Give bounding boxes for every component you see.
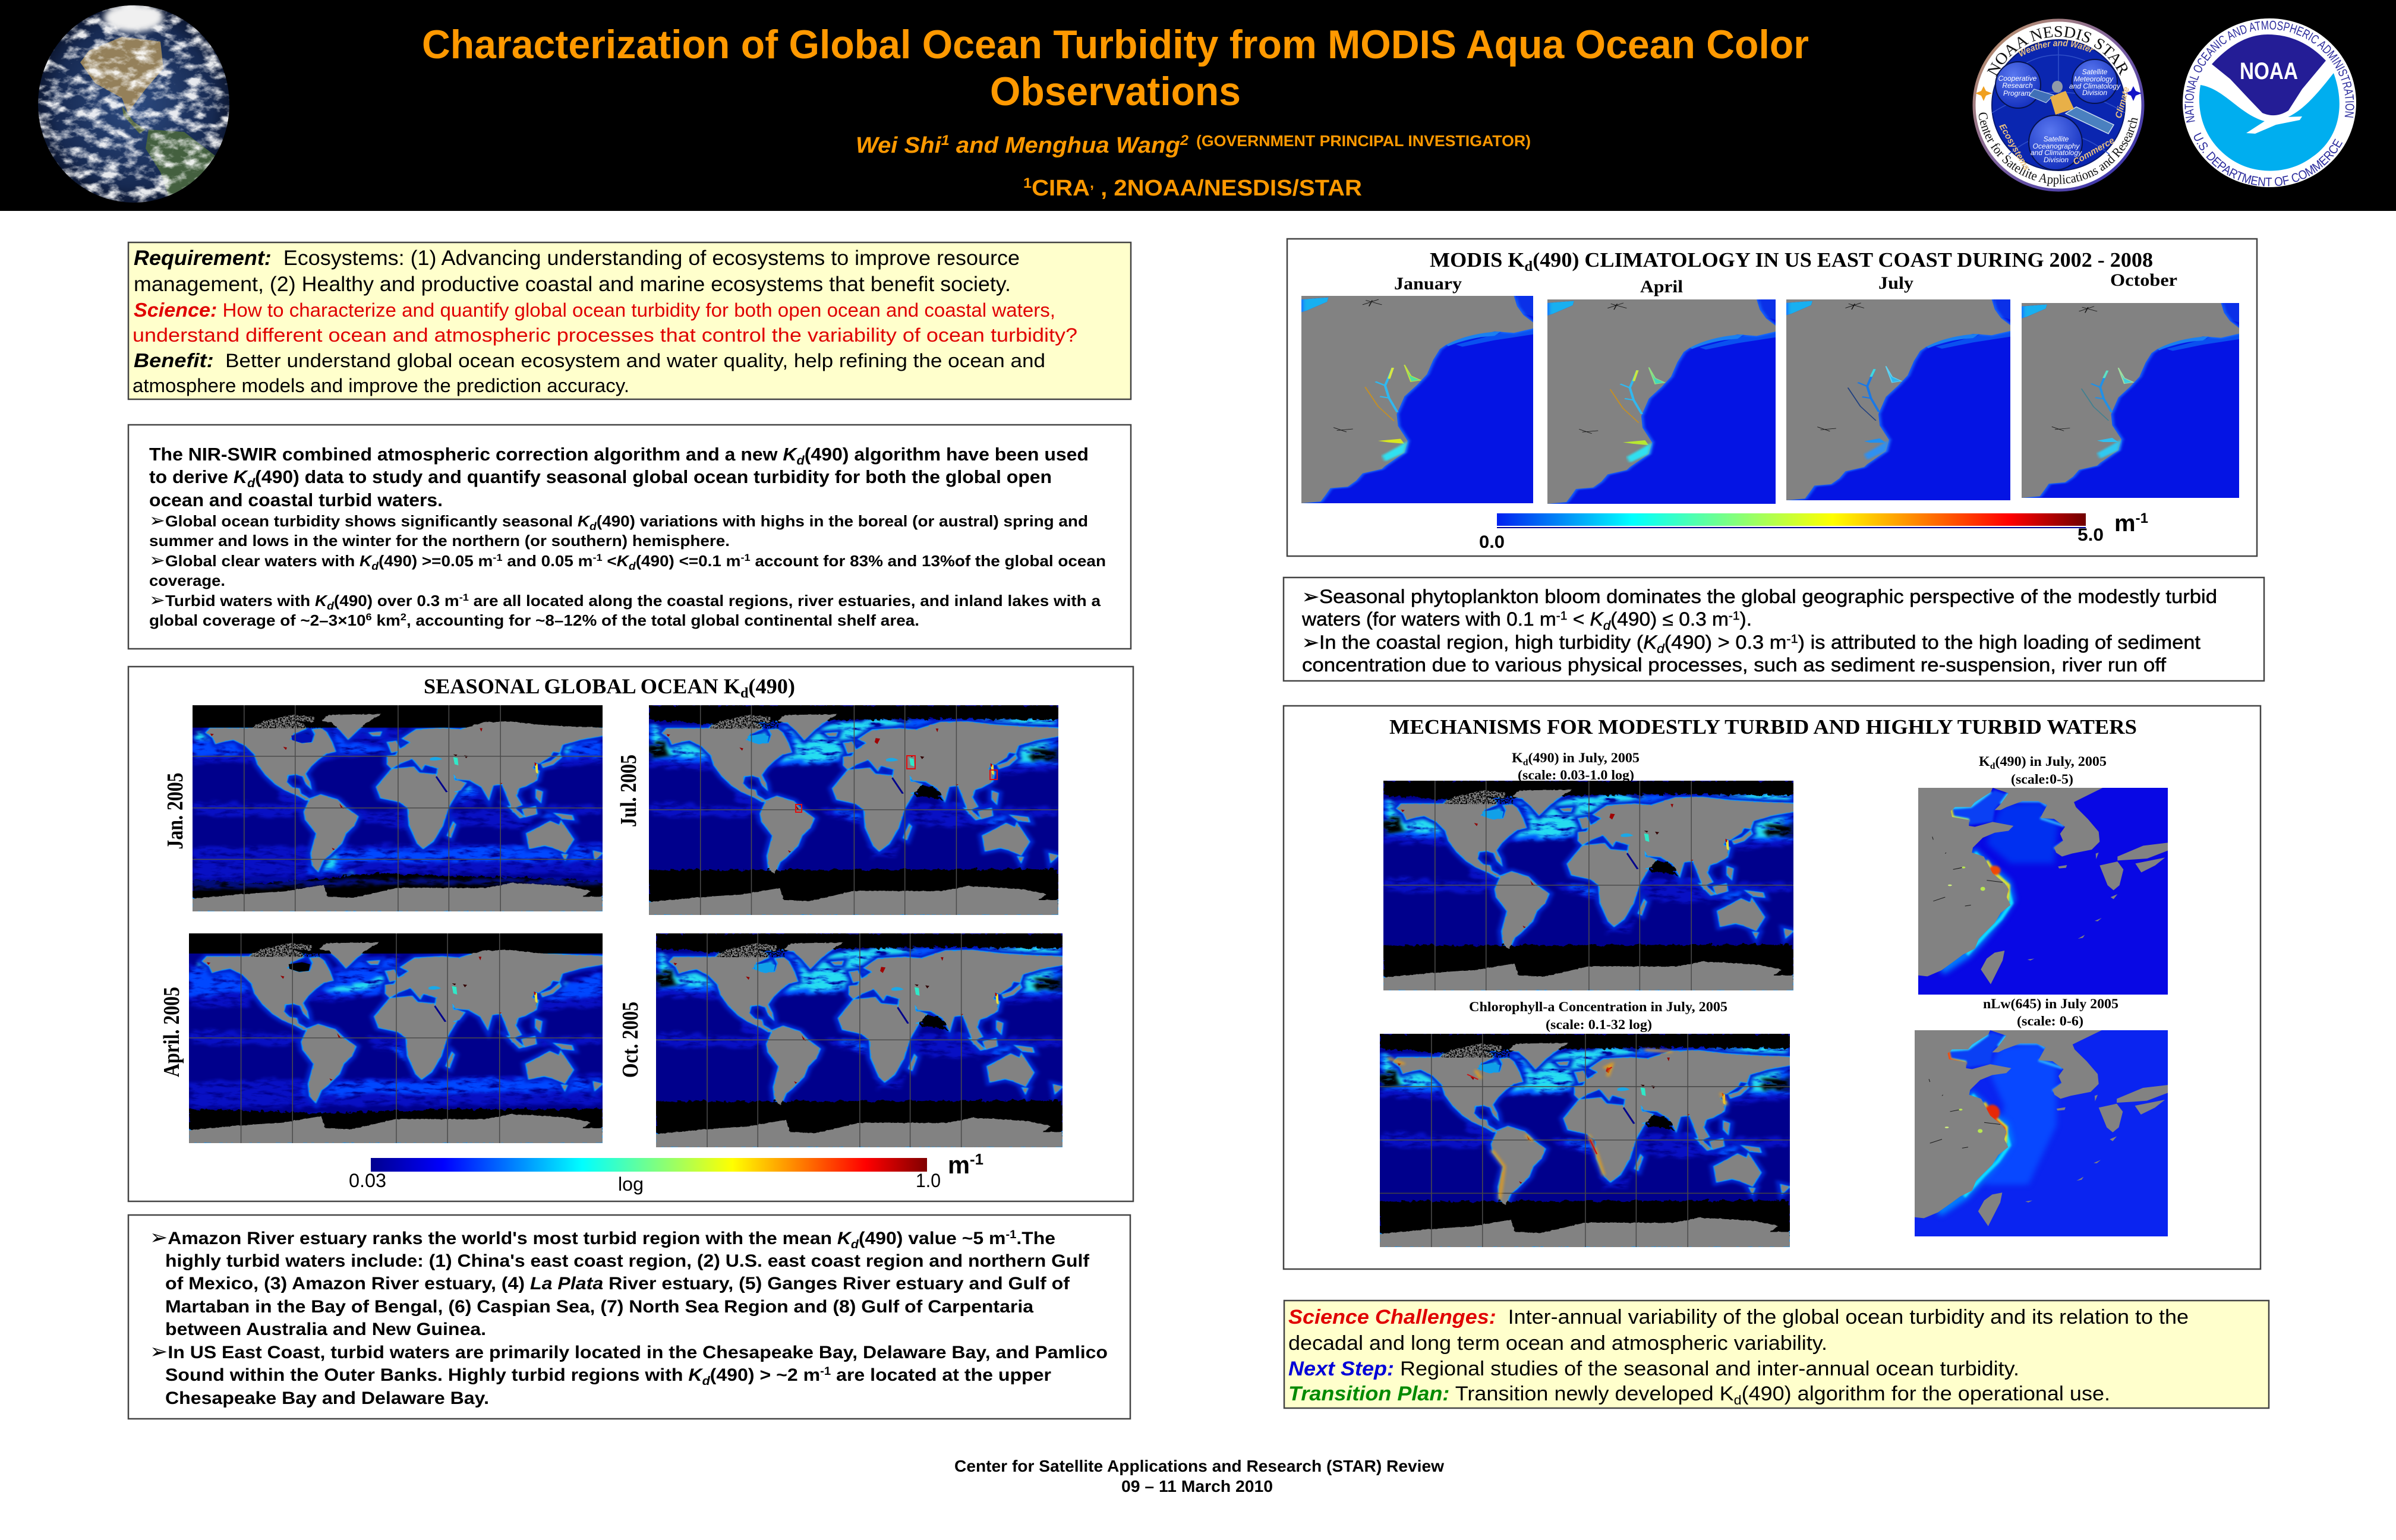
label: April. 2005: April. 2005 <box>159 987 184 1077</box>
panel: algorithm summary text: d <box>629 560 636 572</box>
colour scale: 0.03 to 1.0 log: log <box>618 1173 644 1195</box>
heading: seasonal maps: (490) <box>748 674 795 698</box>
title <box>422 22 1809 114</box>
panel: requirement, science and benefit: Benefit: Better understand global ocean ecosystem and water quality, help refining the ocean and <box>134 349 1045 371</box>
caption: chlorophyll-a: Chlorophyll-a Concentration in July, 2005 <box>1469 999 1727 1014</box>
panel: challenges, next step, transition plan: d <box>1734 1393 1742 1408</box>
panel: turbid regions text: d <box>702 1375 710 1388</box>
map: Kd(490) China coast <box>1918 788 2168 995</box>
icon: Earth globe <box>38 4 229 203</box>
panel: phytoplankton and sediment text <box>1284 578 2264 681</box>
panel: algorithm summary text: 2 <box>401 611 406 623</box>
panel: turbid regions text: (490) value ~5 m <box>859 1229 1005 1248</box>
icon: NOAA NESDIS STAR seal: Program <box>2003 89 2031 97</box>
panel: challenges, next step, transition plan: Next Step: Regional studies of the seasonal and inter-annual ocean turbidity. <box>1288 1358 2019 1380</box>
panel: algorithm summary text: d <box>327 600 335 612</box>
icon: NOAA NESDIS STAR seal: NOAA NESDIS STAR <box>1987 26 2127 77</box>
icon: NOAA logo: NOAA <box>2240 58 2298 84</box>
panel: turbid regions text: -1 <box>820 1365 831 1378</box>
panel: algorithm summary text: ocean and coastal turbid waters. <box>149 490 443 510</box>
icon: NOAA NESDIS STAR seal: Center for Satellite Applications and Research <box>1979 113 2138 187</box>
map: east coast October <box>2022 303 2239 498</box>
panel: algorithm summary text: ➢Global ocean turbidity shows significantly seasonal K <box>149 510 589 531</box>
panel: algorithm summary text: d <box>371 560 379 572</box>
colour scale: 0.03 to 1.0 log: 1.0 <box>916 1170 941 1191</box>
affiliations: , <box>1090 175 1094 191</box>
panel: algorithm summary text: (490) >=0.05 m <box>379 552 493 570</box>
panel: phytoplankton and sediment text: (490) > 0.3 m <box>1664 632 1786 653</box>
panel: algorithm summary text: (490) data to study and quantify seasonal global ocean turbidity for both the global open <box>255 466 1052 487</box>
panel: seasonal global ocean Kd(490) <box>128 667 1133 1201</box>
icon: NOAA NESDIS STAR seal: Division <box>2044 156 2069 164</box>
colour scale: 0.0 to 5.0: m <box>2114 510 2136 537</box>
label: April: April <box>1640 277 1683 296</box>
panel: turbid regions text: .The <box>1016 1229 1055 1248</box>
panel: requirement, science and benefit: management, (2) Healthy and productive coastal and marine ecosystems that benefit society. <box>134 273 1011 296</box>
colour scale: 0.03 to 1.0 log: m <box>948 1151 970 1179</box>
panel: algorithm summary text: coverage. <box>149 572 225 589</box>
panel: phytoplankton and sediment text: ). <box>1740 608 1752 630</box>
caption: nLw(645) <box>1983 996 2118 1028</box>
caption: chlorophyll-a: (scale: 0.1-32 log) <box>1546 1017 1652 1032</box>
panel: turbid regions text: (490) > ~2 m <box>710 1365 820 1385</box>
panel: challenges, next step, transition plan: (490) algorithm for the operational use. <box>1742 1383 2110 1405</box>
panel: mechanisms for turbid waters <box>1284 706 2261 1269</box>
label: January: January <box>1394 274 1462 294</box>
panel: algorithm summary text: summer and lows in the winter for the northern (or southern) hemisphere. <box>149 532 730 550</box>
authors: 1 <box>941 132 950 149</box>
icon: NOAA NESDIS STAR seal: and Climatology <box>2069 82 2121 90</box>
caption: Kd(490) log scale: K <box>1512 750 1522 765</box>
panel: algorithm summary text: The NIR-SWIR combined atmospheric correction algorithm and a new K <box>149 444 796 465</box>
panel: turbid regions text: of Mexico, (3) Amazon River estuary, (4) La Plata River estuary, (5) Ganges River estuary and Gulf of <box>165 1274 1070 1293</box>
label: July: July <box>1878 273 1913 293</box>
caption: Kd(490) log scale <box>1512 750 1640 782</box>
map: January 2005 <box>193 705 603 911</box>
caption: Kd(490) China coast: (scale:0-5) <box>2011 772 2073 787</box>
panel: algorithm summary text: account for 83% and 13%of the global ocean <box>751 552 1106 570</box>
panel: turbid regions text: d <box>851 1238 859 1251</box>
panel: algorithm summary text: -1 <box>592 552 603 563</box>
authors <box>856 132 1531 158</box>
icon: NOAA NESDIS STAR seal: Satellite <box>2044 135 2069 143</box>
panel: phytoplankton and sediment text: K <box>1590 608 1604 630</box>
map: April 2005 <box>189 933 603 1143</box>
colour scale: 0.03 to 1.0 log: -1 <box>970 1150 983 1168</box>
icon: NOAA NESDIS STAR seal: Research <box>2002 81 2033 90</box>
panel: algorithm summary text: 6 <box>366 611 372 623</box>
authors: and Menghua Wang <box>950 133 1180 158</box>
icon: NOAA NESDIS STAR seal: Satellite <box>2082 68 2108 76</box>
panel: challenges, next step, transition plan: Science Challenges: Inter-annual variability of the global ocean turbidity and its relation to the <box>1288 1306 2189 1328</box>
panel: algorithm summary text: < <box>603 552 617 570</box>
panel: turbid regions text: highly turbid waters include: (1) China's east coast region, (2) U.S. east coast region and northern Gulf <box>165 1251 1090 1271</box>
icon: NOAA NESDIS STAR seal: and Climatology <box>2031 149 2082 157</box>
footer <box>954 1457 1444 1495</box>
footer: 09 – 11 March 2010 <box>1121 1477 1273 1495</box>
colour scale: 0.0 to 5.0: -1 <box>2136 510 2148 526</box>
caption: Kd(490) log scale: (scale: 0.03-1.0 log) <box>1518 768 1634 782</box>
affiliations: 1 <box>1023 175 1032 191</box>
heading: climatology: MODIS K <box>1430 248 1522 272</box>
panel: algorithm summary text: ➢Global clear waters with K <box>149 550 371 571</box>
panel: requirement, science and benefit <box>128 242 1131 399</box>
heading: mechanisms: MECHANISMS FOR MODESTLY TURBID AND HIGHLY TURBID WATERS <box>1389 715 2137 739</box>
icon: NOAA NESDIS STAR seal: Meteorology <box>2074 75 2114 83</box>
label: October: October <box>2110 270 2177 290</box>
icon: NOAA logo: U.S. DEPARTMENT OF COMMERCE <box>2194 132 2343 187</box>
panel: US east coast climatology <box>1287 239 2257 556</box>
panel: algorithm summary text <box>128 425 1131 649</box>
affiliations: CIRA <box>1032 176 1090 201</box>
panel: phytoplankton and sediment text: waters (for waters with 0.1 m <box>1302 608 1545 630</box>
map: Kd(490) July 2005 global <box>1383 781 1793 990</box>
map: east coast April <box>1547 299 1776 504</box>
panel: algorithm summary text: K <box>617 552 630 570</box>
heading: seasonal maps: d <box>740 686 749 701</box>
heading: climatology: (490) CLIMATOLOGY IN US EAST COAST DURING 2002 - 2008 <box>1533 248 2153 272</box>
colour scale: 0.0 to 5.0 <box>1479 510 2148 552</box>
caption: Kd(490) China coast <box>1979 754 2107 787</box>
colour scale: 0.0 to 5.0: 5.0 <box>2077 525 2104 545</box>
panel: requirement, science and benefit: understand different ocean and atmospheric processes that control the variability of ocean turbidity? <box>133 324 1077 346</box>
caption: nLw(645): nLw(645) in July 2005 <box>1983 996 2118 1011</box>
icon: NOAA NESDIS STAR seal: Climate <box>2113 86 2132 119</box>
panel: turbid regions text: -1 <box>1005 1229 1017 1241</box>
authors: (GOVERNMENT PRINCIPAL INVESTIGATOR) <box>1196 132 1531 150</box>
panel: algorithm summary text: , accounting for ~8–12% of the total global continental shelf area. <box>406 611 919 629</box>
colour scale: 0.03 to 1.0 log <box>349 1150 983 1195</box>
title: Characterization of Global Ocean Turbidity from MODIS Aqua Ocean Color <box>422 22 1809 67</box>
icon: NOAA NESDIS STAR seal: Ecosystems <box>1997 122 2032 172</box>
panel: challenges, next step, transition plan: Transition Plan: Transition newly developed K <box>1288 1383 1718 1405</box>
map: east coast July <box>1786 299 2010 500</box>
colour scale: 0.0 to 5.0: 0.0 <box>1479 532 1505 552</box>
panel: phytoplankton and sediment text: (490) ≤ 0.3 m <box>1610 608 1729 630</box>
caption: Kd(490) log scale: d <box>1523 758 1528 768</box>
panel: algorithm summary text: -1 <box>459 592 469 603</box>
heading: seasonal maps: SEASONAL GLOBAL OCEAN K <box>424 674 738 698</box>
panel: requirement, science and benefit: Requirement: Ecosystems: (1) Advancing understanding of ecosystems to improve resource <box>134 247 1020 270</box>
map: east coast January <box>1301 296 1533 503</box>
panel: phytoplankton and sediment text: ➢In the coastal region, high turbidity ( K <box>1302 631 1656 654</box>
map: nLw(645) China coast <box>1915 1030 2168 1236</box>
panel: algorithm summary text: and 0.05 m <box>503 552 592 570</box>
icon: NOAA NESDIS STAR seal: Commerce <box>2072 135 2116 167</box>
caption: Kd(490) China coast: d <box>1990 762 1995 771</box>
caption: nLw(645): (scale: 0-6) <box>2017 1014 2083 1028</box>
panel: algorithm summary text: d <box>589 520 597 532</box>
icon: NOAA NESDIS STAR seal: Cooperative <box>1998 74 2037 83</box>
colour scale: 0.03 to 1.0 log: 0.03 <box>349 1170 386 1191</box>
icon: NOAA logo <box>2183 18 2356 187</box>
panel: turbid regions text: Sound within the Outer Banks. Highly turbid regions with K <box>165 1365 701 1385</box>
panel: requirement, science and benefit: Science: How to characterize and quantify global ocean turbidity for both open ocean and coastal waters, <box>134 299 1055 321</box>
panel: algorithm summary text: -1 <box>740 552 751 563</box>
panel: phytoplankton and sediment text: d <box>1657 642 1665 656</box>
header banner <box>0 0 2396 211</box>
panel: phytoplankton and sediment text: -1 <box>1556 610 1567 623</box>
panel: challenges, next step, transition plan <box>1284 1301 2269 1408</box>
icon: NOAA NESDIS STAR seal: Weather and Water <box>2018 40 2094 57</box>
caption: chlorophyll-a <box>1469 999 1727 1032</box>
panel: turbid regions text: are located at the upper <box>831 1365 1051 1385</box>
panel: algorithm summary text: km <box>372 611 401 629</box>
panel: turbid regions text: Chesapeake Bay and Delaware Bay. <box>165 1388 489 1408</box>
authors: Wei Shi <box>856 133 937 158</box>
caption: Kd(490) log scale: (490) in July, 2005 <box>1528 750 1640 765</box>
panel: algorithm summary text: (490) <=0.1 m <box>636 552 740 570</box>
highlight boxes on July map <box>796 756 997 812</box>
panel: turbid regions text: between Australia and New Guinea. <box>165 1320 486 1339</box>
panel: algorithm summary text: d <box>247 476 256 490</box>
panel: phytoplankton and sediment text: < <box>1567 608 1590 630</box>
panel: algorithm summary text: to derive K <box>149 466 247 487</box>
heading: climatology: d <box>1524 259 1533 274</box>
panel: algorithm summary text: -1 <box>493 552 503 563</box>
panel: phytoplankton and sediment text: concentration due to various physical processes, such as sediment re-suspension, river run off <box>1302 654 2166 676</box>
panel: algorithm summary text: (490) over 0.3 m <box>334 592 459 610</box>
panel: turbid regions text: ➢Amazon River estuary ranks the world's most turbid region with the mean K <box>150 1226 850 1249</box>
panel: challenges, next step, transition plan: decadal and long term ocean and atmospheric variability. <box>1288 1332 1827 1355</box>
icon: NOAA logo: NATIONAL OCEANIC AND ATMOSPHERIC ADMINISTRATION <box>2184 20 2354 122</box>
icon: NOAA NESDIS STAR seal: Oceanography <box>2033 142 2080 150</box>
map: chlorophyll-a July 2005 global <box>1380 1034 1790 1247</box>
map: July 2005 <box>649 705 1058 915</box>
panel: turbid regions text: ➢In US East Coast, turbid waters are primarily located in the Chesapeake Bay, Delaware Bay, and Pamlico <box>150 1340 1108 1364</box>
panel: algorithm summary text: global coverage of ~2–3×10 <box>149 611 351 629</box>
panel: phytoplankton and sediment text: d <box>1603 619 1611 633</box>
label: Jul. 2005: Jul. 2005 <box>616 755 641 827</box>
caption: Kd(490) China coast: (490) in July, 2005 <box>1995 754 2107 769</box>
icon: NOAA NESDIS STAR seal: Division <box>2082 89 2107 97</box>
panel: algorithm summary text: are all located along the coastal regions, river estuaries, and inland lakes with a <box>469 592 1101 610</box>
icon: NOAA NESDIS STAR seal <box>1973 19 2144 191</box>
caption: Kd(490) China coast: K <box>1979 754 1990 769</box>
panel: phytoplankton and sediment text: -1 <box>1786 633 1798 646</box>
panel: phytoplankton and sediment text: ) is attributed to the high loading of sediment <box>1798 632 2200 653</box>
label: Oct. 2005: Oct. 2005 <box>618 1002 643 1078</box>
title: Observations <box>990 69 1241 114</box>
panel: turbid regions text: Martaban in the Bay of Bengal, (6) Caspian Sea, (7) North Sea Region and (8) Gulf of Carpentaria <box>165 1297 1033 1317</box>
authors: 2 <box>1180 132 1189 149</box>
map: October 2005 <box>656 933 1063 1147</box>
panel: algorithm summary text: (490) algorithm have been used <box>805 444 1089 465</box>
panel: phytoplankton and sediment text: -1 <box>1729 610 1740 623</box>
panel: algorithm summary text: d <box>797 454 805 468</box>
affiliations: , 2NOAA/NESDIS/STAR <box>1094 176 1362 201</box>
footer: Center for Satellite Applications and Research (STAR) Review <box>954 1457 1444 1475</box>
panel: phytoplankton and sediment text: ➢Seasonal phytoplankton bloom dominates the global geographic perspective of the modestly turbid <box>1302 585 2217 608</box>
panel: requirement, science and benefit: atmosphere models and improve the prediction accuracy. <box>133 375 629 396</box>
panel: algorithm summary text: ➢Turbid waters with K <box>149 590 326 611</box>
label: Jan. 2005: Jan. 2005 <box>163 772 188 850</box>
panel: algorithm summary text: (490) variations with highs in the boreal (or austral) spring and <box>597 512 1088 530</box>
panel: turbid regions text <box>128 1215 1130 1419</box>
